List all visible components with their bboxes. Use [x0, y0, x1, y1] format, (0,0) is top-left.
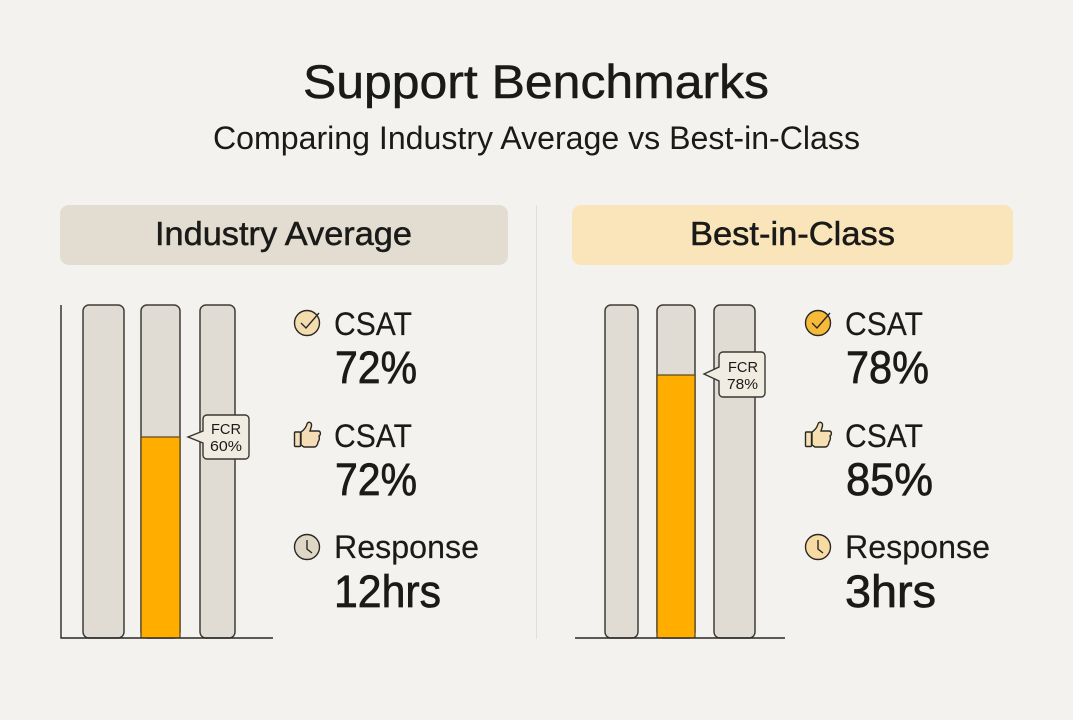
- icon: thumbs up: [806, 422, 831, 447]
- metric: response 12hrs: [294, 529, 479, 617]
- panel heading: best-in-class: [572, 205, 1013, 265]
- callout: FCR 60%: 60%: [210, 438, 242, 455]
- panel: best-in-class: [572, 205, 1013, 638]
- metric: response 3hrs: [806, 529, 990, 617]
- bar chart: industry average: [61, 305, 273, 638]
- subtitle: Comparing Industry Average vs Best-in-Class: [213, 120, 860, 156]
- metric: CSAT 72% check: 72%: [335, 342, 417, 393]
- panel: industry average: [60, 205, 508, 638]
- title: Support Benchmarks: [303, 55, 769, 108]
- metric: CSAT 72% check: [294, 306, 417, 393]
- panel heading: industry average: Industry Average: [155, 215, 412, 252]
- icon: clock: [294, 534, 320, 560]
- callout: FCR 60%: FCR: [211, 421, 241, 438]
- panel heading: industry average: [60, 205, 508, 265]
- panel heading: best-in-class: Best-in-Class: [690, 215, 895, 252]
- callout: FCR 78%: FCR: [728, 359, 758, 376]
- metric: CSAT 78% check: CSAT: [845, 306, 923, 342]
- icon: thumbs up: [294, 422, 320, 447]
- callout: FCR 78%: [704, 352, 765, 397]
- metric: CSAT 72% thumb: [294, 418, 417, 505]
- bar chart: best-in-class: [575, 305, 785, 638]
- icon: clock: [806, 534, 830, 560]
- metric: response 3hrs: Response: [845, 529, 990, 565]
- metric: CSAT 78% check: 78%: [846, 342, 929, 393]
- metric: response 3hrs: 3hrs: [845, 566, 936, 617]
- metric: CSAT 78% check: [806, 306, 929, 393]
- metric: response 12hrs: Response: [334, 529, 479, 565]
- metric: response 12hrs: 12hrs: [334, 566, 441, 617]
- callout: FCR 78%: 78%: [727, 376, 758, 393]
- icon: check circle: [806, 310, 830, 336]
- metric: CSAT 85% thumb: CSAT: [845, 418, 923, 454]
- metric: CSAT 72% thumb: 72%: [335, 454, 417, 505]
- metric: CSAT 72% check: CSAT: [334, 306, 412, 342]
- icon: check circle: [294, 310, 320, 336]
- metric: CSAT 85% thumb: [806, 418, 933, 505]
- metric: CSAT 72% thumb: CSAT: [334, 418, 412, 454]
- callout: FCR 60%: [188, 415, 249, 459]
- metric: CSAT 85% thumb: 85%: [846, 454, 933, 505]
